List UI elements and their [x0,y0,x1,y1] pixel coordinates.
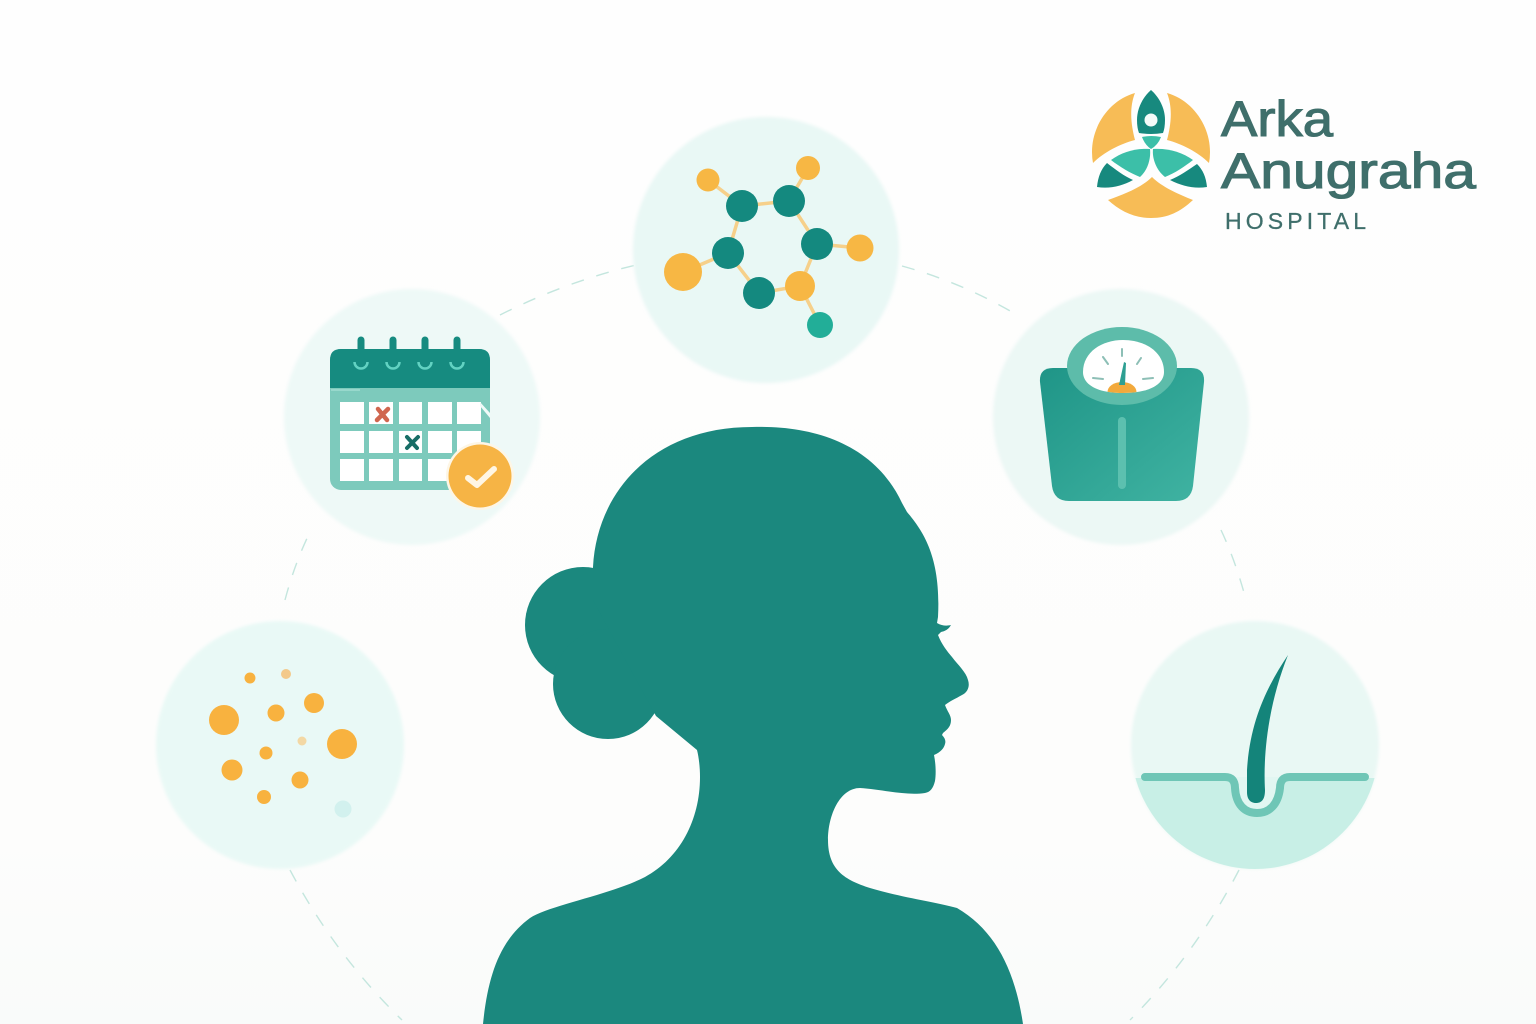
dashed connecting ring [285,265,1246,1020]
icon: menstrual calendar [284,289,540,545]
icon: weight scale [993,289,1249,545]
logo text: Arka: Arka [1221,91,1333,147]
logo text: Anugraha: Anugraha [1221,143,1476,199]
icon: acne spots [156,621,404,869]
infographic canvas [156,90,1477,1024]
logo mark [1092,90,1210,218]
logo text: Hospital: HOSPITAL [1225,208,1366,234]
logo: Arka Anugraha Hospital [1092,90,1476,234]
woman silhouette [483,427,1023,1024]
icon: molecule [633,117,899,383]
icon: hair follicle [1125,621,1385,873]
